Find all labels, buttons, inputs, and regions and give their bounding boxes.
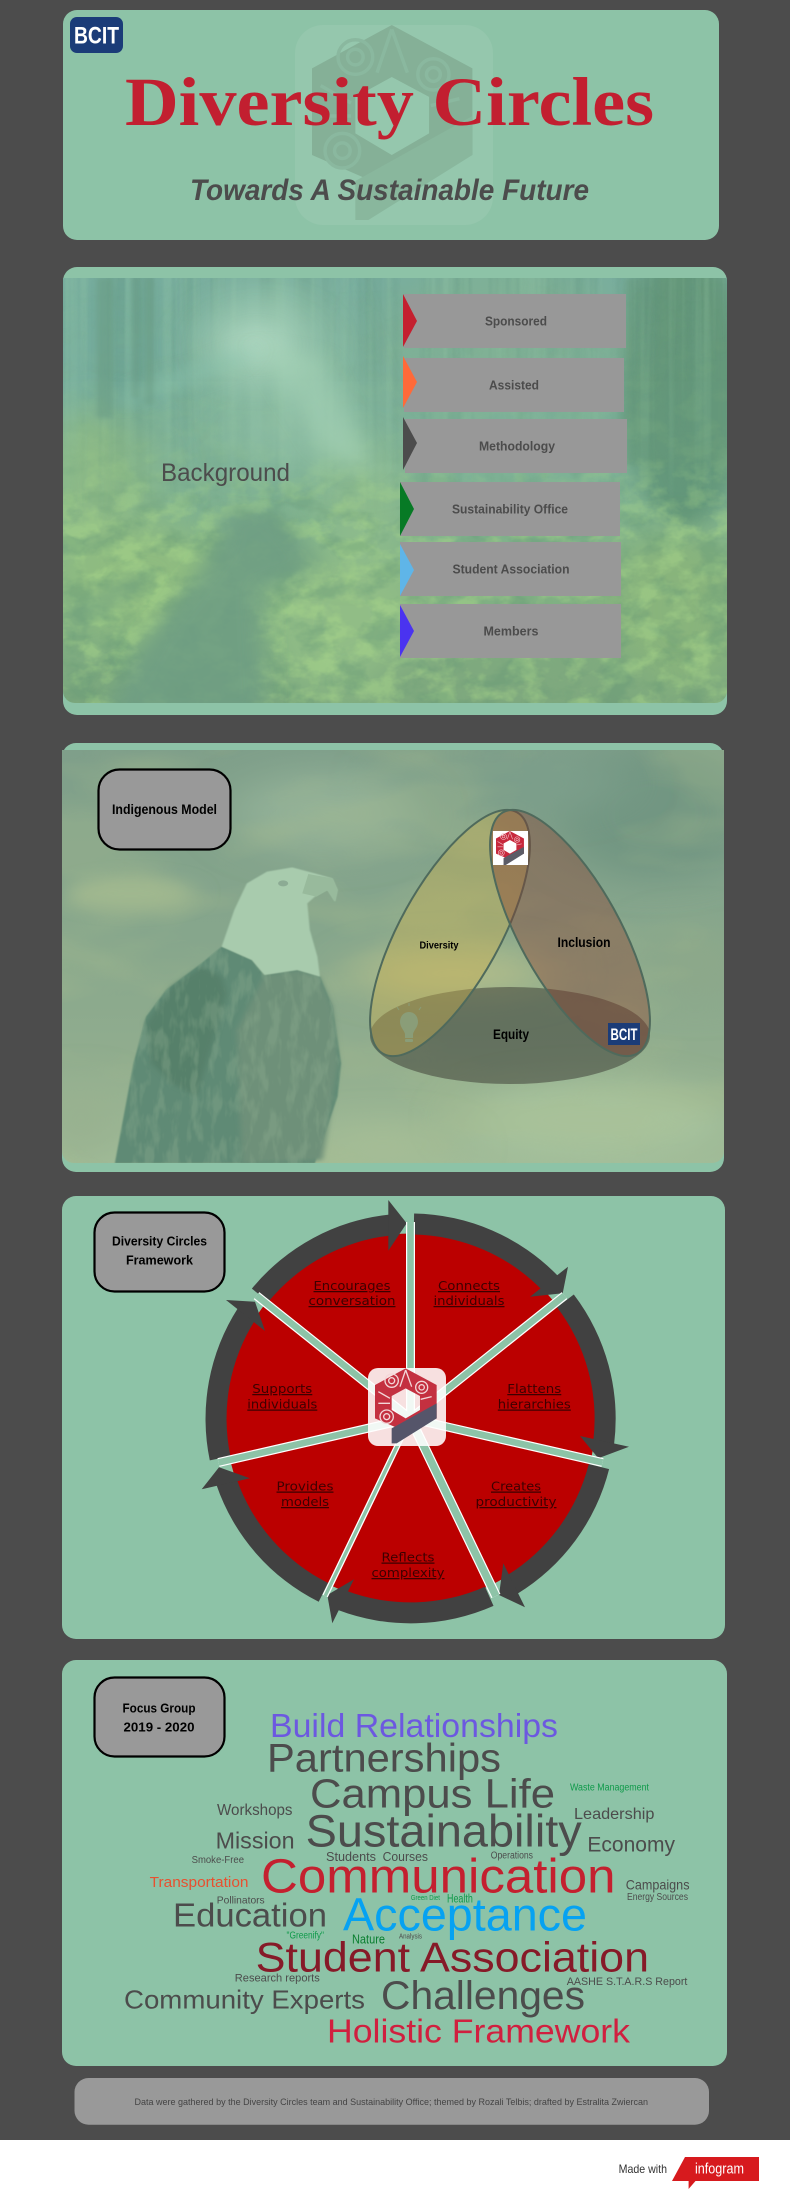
panel: indigenous model <box>50 743 756 1172</box>
icon: logo tile <box>493 831 528 865</box>
word cloud: Smoke-Free <box>192 1854 244 1866</box>
callout: Focus Group: Focus Group <box>122 1700 196 1716</box>
label: Diversity: Diversity <box>420 940 459 952</box>
word cloud: Transportation <box>150 1874 248 1891</box>
word cloud: Sustainability <box>306 1806 582 1857</box>
venn: Diversity <box>339 788 561 1078</box>
list item: Sponsored <box>403 294 626 348</box>
list item: Sponsored: Sponsored <box>485 314 547 328</box>
word cloud: Waste Management <box>570 1783 649 1794</box>
callout: Indigenous Model <box>98 770 230 850</box>
wheel label: Provides models <box>276 1478 334 1509</box>
word cloud: Partnerships <box>267 1737 501 1781</box>
word cloud: Health <box>447 1894 473 1906</box>
word cloud: Green Diet <box>411 1895 440 1902</box>
word cloud: Community Experts <box>124 1984 365 2014</box>
arrow: segment 6 <box>206 1300 265 1460</box>
wheel label: Flattens hierarchies: hierarchies <box>498 1396 571 1412</box>
wheel label: Supports individuals: Supports <box>252 1381 312 1396</box>
callout: Diversity Circles Framework <box>94 1212 224 1292</box>
venn: Equity <box>370 987 650 1084</box>
eagle and sky photo <box>50 747 756 1167</box>
watermark logo <box>295 25 493 225</box>
panel: focus group <box>62 1660 727 2066</box>
wheel label: Connects individuals: individuals <box>434 1293 504 1308</box>
background panel frame <box>63 267 727 715</box>
list item: Methodology <box>403 417 627 473</box>
wheel label: Encourages conversation: Encourages <box>314 1278 390 1293</box>
wheel label: Flattens hierarchies <box>498 1381 571 1412</box>
spokes <box>218 1222 602 1596</box>
word cloud: Acceptance <box>343 1889 587 1941</box>
arrow: segment 1 <box>414 1214 568 1297</box>
word cloud: Campus Life <box>310 1771 555 1817</box>
icon: light bulb <box>397 1003 421 1042</box>
wheel label: Creates productivity <box>476 1478 557 1509</box>
wheel label: Supports individuals <box>247 1381 317 1412</box>
icon: BCIT logo <box>70 17 123 53</box>
list item: Student Association: Student Association <box>452 562 570 576</box>
word cloud: Nature <box>352 1933 385 1947</box>
word cloud: Analysis <box>399 1934 422 1941</box>
word cloud: Courses <box>383 1849 428 1864</box>
wheel label: Encourages conversation <box>308 1278 396 1308</box>
eagle silhouette <box>115 867 341 1163</box>
callout: Indigenous Model: Indigenous Model <box>112 801 217 817</box>
made with infogram <box>619 2157 759 2189</box>
list item: Methodology: Methodology <box>479 440 555 454</box>
list item: Assisted: Assisted <box>489 378 539 392</box>
list item: Members: Members <box>484 624 539 638</box>
list item: Sustainability Office: Sustainability Office <box>452 502 568 516</box>
word cloud: Education <box>173 1897 327 1934</box>
icon: BCIT logo: BCIT <box>74 22 119 50</box>
word cloud: Energy Sources <box>627 1891 688 1903</box>
subtitle: Towards A Sustainable Future <box>190 174 589 207</box>
wheel label: Connects individuals <box>434 1278 504 1308</box>
wheel label: Flattens hierarchies: Flattens <box>507 1381 561 1396</box>
word cloud: Research reports <box>235 1973 320 1985</box>
footer credit <box>74 2078 709 2125</box>
list item: Sustainability Office <box>400 482 620 536</box>
word cloud: Campaigns <box>626 1876 690 1892</box>
callout: Diversity Circles Framework: Diversity Circles <box>112 1234 207 1248</box>
wheel label: Reflects complexity <box>372 1550 445 1580</box>
word cloud: Build Relationships <box>270 1707 558 1744</box>
venn: Inclusion <box>459 788 681 1078</box>
panel: framework <box>62 1196 725 1639</box>
framework panel background <box>62 1196 725 1639</box>
word cloud: Mission <box>216 1827 295 1853</box>
panel: background <box>40 250 746 717</box>
icon: BCIT tile <box>608 1023 640 1045</box>
title panel background <box>63 10 719 240</box>
wheel label: Provides models: models <box>281 1494 329 1509</box>
word cloud: Operations <box>491 1850 533 1861</box>
footer credit: Data were gathered by the Diversity Circles team and Sustainability Office; themed by Rozali Telbis; drafted by Estralita Zwiercan <box>134 2097 648 2108</box>
wheel label: Supports individuals: individuals <box>247 1396 317 1412</box>
list item: Student Association <box>400 542 621 596</box>
wheel label: Creates productivity: productivity <box>476 1494 557 1509</box>
forest photo <box>63 278 727 703</box>
word cloud: Economy <box>587 1834 675 1857</box>
wheel label: Creates productivity: Creates <box>491 1478 541 1494</box>
list item: Members <box>400 604 621 658</box>
icon: infogram badge <box>672 2157 759 2189</box>
section label: Background: Background <box>161 459 290 487</box>
word cloud: Workshops <box>217 1802 293 1819</box>
wheel label: Reflects complexity: Reflects <box>382 1550 434 1564</box>
word cloud: Student Association <box>256 1934 649 1981</box>
panel: title <box>63 10 719 240</box>
wheel label: Encourages conversation: conversation <box>308 1293 396 1308</box>
word cloud: AASHE S.T.A.R.S Report <box>567 1976 687 1988</box>
callout: Diversity Circles Framework: Framework <box>126 1252 194 1268</box>
word cloud: Pollinators <box>217 1895 265 1907</box>
word cloud: Challenges <box>381 1974 585 2018</box>
made with infogram: Made with <box>619 2162 667 2176</box>
word cloud: "Greenify" <box>286 1930 324 1942</box>
label: Inclusion: Inclusion <box>558 934 610 950</box>
path <box>101 510 322 717</box>
indigenous model panel frame <box>62 743 724 1172</box>
word cloud: Leadership <box>574 1806 655 1823</box>
word cloud: Communication <box>261 1851 616 1904</box>
arrow: segment 5 <box>202 1467 328 1602</box>
callout: Focus Group <box>94 1678 224 1756</box>
icon: centre logo <box>368 1368 446 1446</box>
word cloud: Students <box>326 1849 376 1864</box>
wheel label: Connects individuals: Connects <box>438 1278 500 1293</box>
word cloud <box>124 1707 690 2050</box>
callout: Focus Group: 2019 - 2020 <box>124 1720 194 1734</box>
arrow: segment 4 <box>327 1579 494 1623</box>
icon: BCIT tile: BCIT <box>610 1026 638 1044</box>
white footer band <box>0 2140 790 2200</box>
icon: infogram badge: infogram <box>695 2160 744 2178</box>
arrow: segment 3 <box>499 1464 609 1607</box>
venn diagram <box>339 788 681 1084</box>
wheel disc <box>226 1234 596 1604</box>
list item: Assisted <box>403 356 624 412</box>
wheel label: Reflects complexity: complexity <box>372 1565 445 1580</box>
heading: Diversity Circles: Diversity Circles <box>125 64 654 140</box>
label: Equity: Equity <box>493 1026 529 1042</box>
wheel label: Provides models: Provides <box>276 1478 334 1494</box>
chart: red wheel <box>202 1200 629 1623</box>
word cloud: Holistic Framework <box>327 2013 631 2050</box>
arrow: segment 7 <box>252 1200 407 1302</box>
arrow: segment 2 <box>557 1294 629 1458</box>
focus group panel background <box>62 1660 727 2066</box>
